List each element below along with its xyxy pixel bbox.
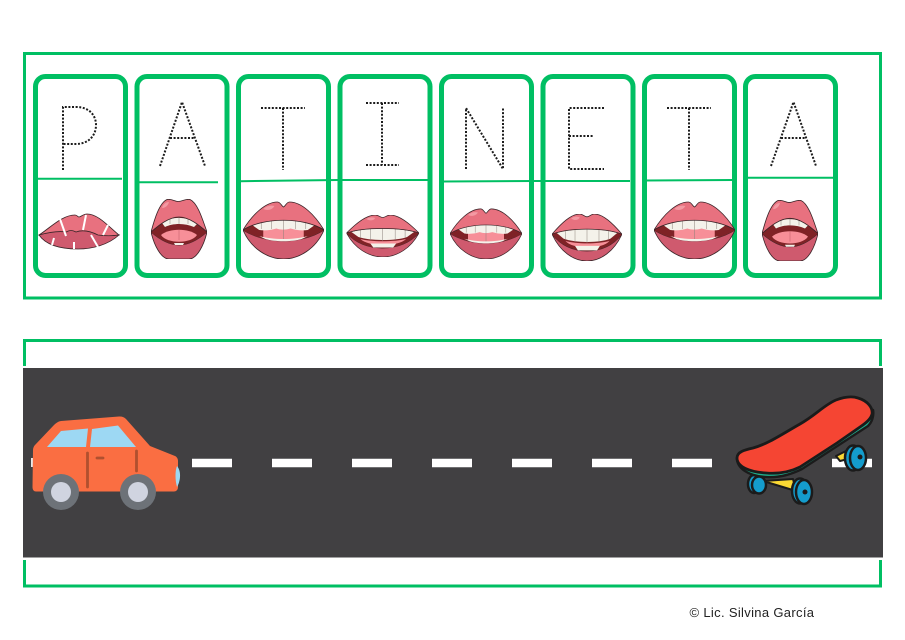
mouth: open A xyxy=(151,199,207,259)
icon: car xyxy=(31,416,180,510)
card: letter P xyxy=(36,76,126,276)
card: letter T second xyxy=(644,76,735,276)
mouth: smile I xyxy=(346,215,419,257)
letter T: T xyxy=(257,91,309,187)
mouth: wide teeth xyxy=(654,202,735,259)
letter P: P xyxy=(51,91,109,187)
card: letter A xyxy=(136,76,227,276)
mouth: wide teeth xyxy=(243,202,324,259)
credit: © Lic. Silvina García xyxy=(690,605,815,620)
letter A: A xyxy=(153,87,211,183)
mouth: N xyxy=(450,209,522,259)
letter A: A xyxy=(765,87,823,183)
panel: word frame xyxy=(24,54,880,298)
card: letter N xyxy=(442,76,534,276)
card: letter I xyxy=(340,76,432,276)
mouth: closed lips xyxy=(39,214,119,249)
card: letter E xyxy=(534,76,633,276)
road xyxy=(23,368,883,558)
letter E: E xyxy=(558,91,616,187)
card: letter A second xyxy=(746,76,836,276)
mouth: open A xyxy=(762,200,818,261)
icon: skateboard xyxy=(737,397,873,504)
letter T: T xyxy=(663,91,715,187)
panel: road game frame xyxy=(23,340,883,586)
letter I: I xyxy=(370,88,394,184)
card: letter T xyxy=(238,76,338,276)
letter N: N xyxy=(454,91,516,187)
mouth: E xyxy=(552,214,622,261)
